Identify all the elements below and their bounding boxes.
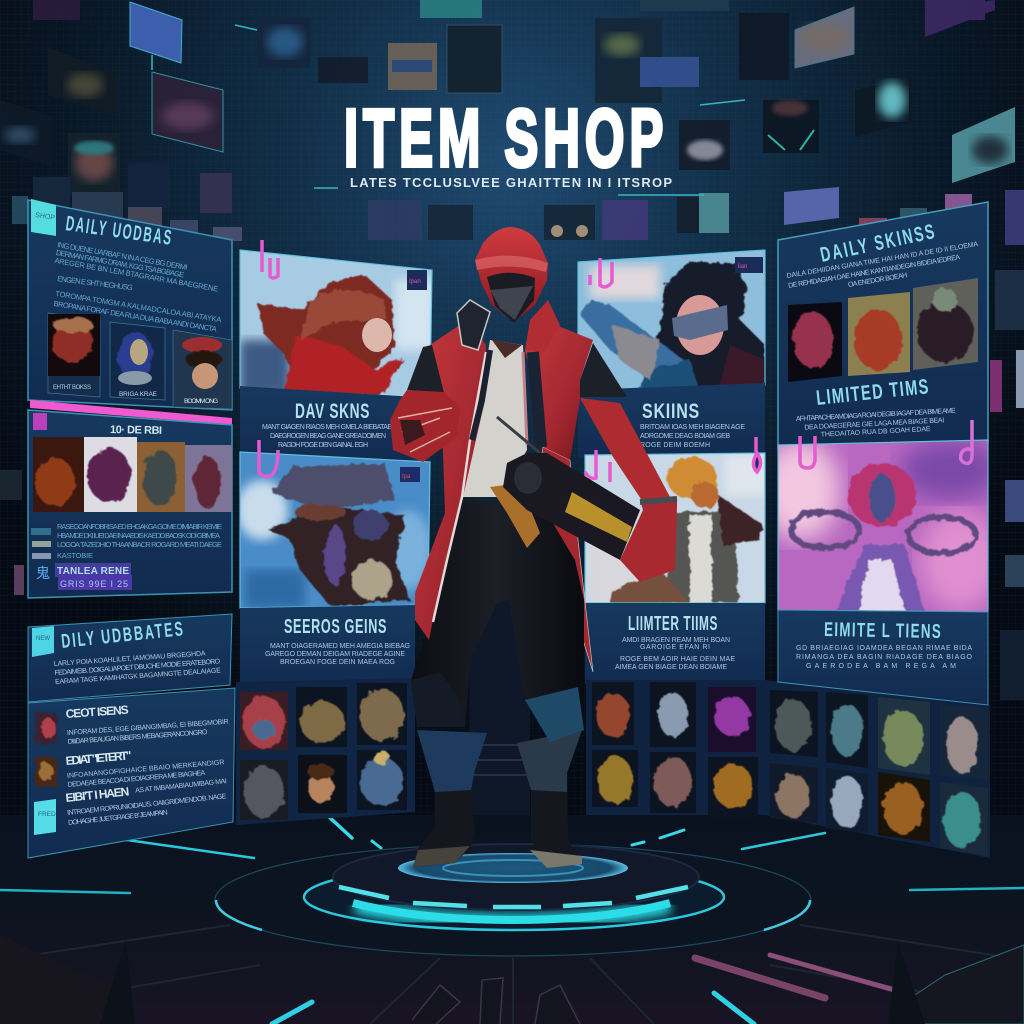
item 1: CEOT ISENS — [65, 703, 130, 721]
caption: day skins — [240, 386, 430, 462]
text block: OA ENEDOR BOEAH — [848, 272, 908, 289]
text block: intro lines — [54, 240, 222, 294]
panel: left daily updates — [28, 199, 232, 410]
thumbnail: blue portrait — [110, 322, 165, 400]
item 2: EDIAT "IETERT" — [65, 748, 132, 768]
item icons — [35, 712, 57, 787]
text block: DE REHIDAGIAH DAE HAINE KANTIANDEGIN BIDEIA IEDREA — [788, 254, 961, 290]
card image: red-haired hero: Ipan — [409, 279, 421, 285]
card image: ice mech — [236, 450, 432, 610]
text block — [786, 241, 982, 299]
item 3: INTROAEM ROPRUNIOIDAUS. OAIIGRIDMENDOB. NAGE — [67, 793, 227, 817]
item 1: DIIIDAR BEAUGAN BIBERS MEBAGERANCONGRO — [67, 729, 208, 746]
text block: AFHTAPACHEAMDIAGA ROAI DEGIB IAGAF DEA BIME AME — [796, 408, 956, 423]
text block: body: LOGOA TAZEDHIO THAANBACR ROGARD MEATI DAEGE — [57, 540, 222, 549]
thumbnail: red hat portrait — [173, 330, 232, 409]
text block: body: RASEGOANFOBRISA ED EHGAKGA GOME DIMIABIR KEMIE — [57, 522, 222, 531]
text block: subheading: ENGEN E SHT HEGHUSG — [57, 274, 133, 292]
pink divider bar — [30, 400, 232, 425]
right arm — [580, 343, 627, 397]
back coat tail — [527, 447, 593, 672]
skin thumbnails — [788, 278, 978, 382]
item 2 — [65, 740, 225, 789]
card image: goggled hero — [576, 248, 768, 390]
collar — [457, 300, 490, 350]
text block: LARLY POIA KOAHLILET, IAMOMAU BRGEGHDA — [54, 650, 206, 668]
caption: skins: ADRGOME DEAG BOIAM GEB — [640, 433, 730, 440]
icon: teal tag — [31, 199, 56, 236]
item 3: EIBI'T I HAEN — [65, 784, 130, 805]
caption: limited items: ROGE BEM AOIR HAIE DEIN MAE — [620, 656, 735, 663]
caption: skins — [578, 383, 765, 458]
caption: seeros geins — [240, 605, 415, 688]
panel: left daily updates 2 — [28, 614, 232, 702]
heading: section: 10· DE RBI — [110, 424, 162, 437]
panel: left featured grid — [28, 410, 232, 598]
hero character — [390, 227, 677, 868]
text block: EARAM TAGE KAMIHATGK BAGAMNGTE DEALAIAGE — [55, 667, 221, 686]
platform — [215, 844, 811, 956]
thumbnail grid: far right — [770, 690, 988, 856]
thumbnail grid: center right — [586, 680, 990, 858]
panel: right caption limited items: GAERODEA BAM REGA AM — [806, 663, 956, 670]
right glove — [620, 497, 677, 582]
pink U tab marks — [259, 240, 972, 482]
thumbnail: masked portrait: EHTHT BOKSS — [53, 385, 91, 391]
caption: seeros geins: SEEROS GEINS — [284, 616, 387, 638]
panel: left item list — [28, 688, 235, 858]
purple price box: TANLEA RENE — [57, 566, 129, 577]
floating background screens — [0, 0, 1024, 700]
thumbnail: red hat portrait: BOOMM ONG — [184, 398, 218, 405]
icon: teal tag — [34, 799, 56, 835]
image strip — [33, 437, 232, 512]
icon: pink tag — [33, 413, 47, 430]
item 3 — [65, 774, 230, 827]
neon floor strips — [0, 816, 1024, 1024]
stairs behind hero — [470, 600, 530, 815]
card image: ice mech: Ipa — [402, 474, 411, 480]
purple price box — [55, 563, 132, 590]
jacket right — [525, 320, 593, 460]
thumbnail grid: left — [236, 678, 415, 825]
text block: DEA DOAEGERAE GIE LAGA MEA BIAGE BEAI — [804, 417, 944, 432]
heading: daily updates: DAILY UODBAS — [64, 212, 174, 250]
text block — [796, 408, 957, 440]
caption: day skins: RAGDH FOGE DEN GAINAL EGH — [278, 442, 368, 449]
caption: skins: BRITOAM IOAS MEH BIAGEN AGE — [640, 424, 745, 431]
side labels — [31, 528, 51, 581]
item 3: AS AT IMBAMABIAUMIBAG MAI — [135, 778, 227, 795]
jacket left — [415, 320, 486, 640]
panel: right caption limited items: EIMITE L TIENS — [824, 619, 942, 643]
card image: goggled hero: lian — [738, 264, 747, 270]
card image: magenta armour — [778, 440, 988, 612]
panel: right caption limited items: RIMANGA DEA BAGIN RIADAGE DEA BIAGO — [796, 654, 973, 661]
caption: day skins: MANT GIAGEN RIAOS MEH GMELA BIEBATAE — [262, 424, 392, 431]
item 1: INFORAM DES, EGE GIBANGIMBAG, EI BIBEGMOBIR — [67, 719, 229, 737]
caption: limited items: AMDI BRAGEN REAM MEH BOAN — [622, 637, 730, 644]
text block — [54, 649, 222, 686]
text block: FEDAIMEIB. DOIGALIAPOET DBUCHE MODIE ERATEBORO — [54, 658, 221, 677]
left arm — [407, 345, 444, 393]
text block: intro lines: AREGER BE BN LEM BTAGRARR MA BAEGRENE — [54, 256, 219, 294]
caption: seeros geins: BROEGAN FOGE DEIN MAEA ROG — [280, 659, 395, 666]
subtitle: LATES TCCLUSLVEE GHAITTEN IN I ITSROP — [350, 175, 672, 190]
thumbnail: blue portrait: BRIGA KRAE — [119, 391, 158, 398]
item 2: DEDAEAE BEACOA DI EOIAGRERA ME BIAGHEA — [67, 770, 206, 789]
icon: teal tag — [32, 626, 54, 657]
text block: THEOAITAO RUA DB GOAH EDAE — [821, 426, 931, 439]
caption: skins: ROGE DEIM BOEMH — [640, 442, 710, 449]
floor — [0, 815, 1024, 1024]
text block: intro lines: DERMAN FARMG DRAM, KGG TSA BGBAGE — [55, 248, 185, 279]
trousers — [411, 497, 584, 742]
item 1 — [65, 696, 230, 746]
caption: limited items: GAROIGE EFAN RI — [640, 644, 710, 651]
panel: center-left cards — [236, 248, 435, 825]
text block: description: TOROMPA TOMGM A KALMADCALOA ABI ATAYKA — [55, 289, 222, 324]
panel: right daily skins — [778, 202, 988, 448]
icon: teal tag: SHOP — [35, 212, 56, 222]
caption: seeros geins: MANT OIAGERAMED MEH AMEGIA BIEBAG — [270, 643, 410, 650]
text block: DAILA DEHIIDAN GIANA TIME HAI HAN ID A DE ID II ELOEMA — [786, 241, 979, 280]
caption: day skins: DAEGROGEN BEAG GANE GREA DOIMEN — [270, 433, 386, 440]
caption: limited items: LIIMTER TIIMS — [628, 613, 718, 635]
panel: right caption limited items — [778, 610, 988, 705]
text block: body — [57, 522, 222, 560]
caption: limited items: AIMEA GEN BIAGE DEAN BOIAME — [615, 664, 727, 671]
boots — [413, 730, 582, 868]
heading: limited times: LIMITED TIMS — [815, 375, 931, 410]
text block: intro lines: ING DUENE UARBAF N IN A CEG BG DERMI — [57, 240, 188, 272]
heading: DILY UDBBATES — [60, 618, 186, 653]
title: ITEM SHOP — [344, 93, 668, 184]
caption: limited items — [585, 603, 765, 684]
icon: teal tag: FRED — [38, 811, 56, 818]
caption: skins: SKIINS — [642, 400, 700, 423]
weapon — [490, 417, 640, 560]
shirt — [463, 340, 527, 497]
corner blocks — [0, 935, 120, 1024]
purple price box: GRIS 99E I 25 — [60, 579, 128, 589]
card image: red-haired hero — [238, 248, 435, 400]
panel: center-right cards — [576, 248, 990, 858]
panel: right caption limited items: GD BRIAEGIAG IOAMDEA BEGAN RIMAE BIDA — [796, 645, 972, 652]
item 3: DOHAGHE JUETGRAGE B' JEAMPAIN — [68, 809, 168, 827]
text block: body: HBA MDE DKI IUEI DAE INAAEDIS KA EDD BAOSK ODI GBIMEA — [57, 531, 220, 540]
text block: body: KASTOBIE — [57, 551, 93, 560]
helmet — [475, 227, 548, 323]
text block: description: BROPANA FORAF DEA RUA DUA BABA ANDI DANCTA — [53, 299, 217, 334]
item 2: INFOANANGOFIGHAICE BBAIO MERKEANDIGR — [67, 759, 225, 780]
heading: daily skins: DAILY SKINSS — [818, 220, 938, 267]
thumbnail: masked portrait — [48, 313, 100, 397]
caption: seeros geins: GAREGO DEMAN DEIGAM RIADEGE AGINE — [265, 651, 405, 658]
side labels: 鬼 — [36, 565, 50, 581]
caption: day skins: DAV SKNS — [295, 400, 370, 423]
card image: golden-haired figure — [583, 453, 767, 605]
icon: teal tag: NEW — [36, 636, 50, 642]
